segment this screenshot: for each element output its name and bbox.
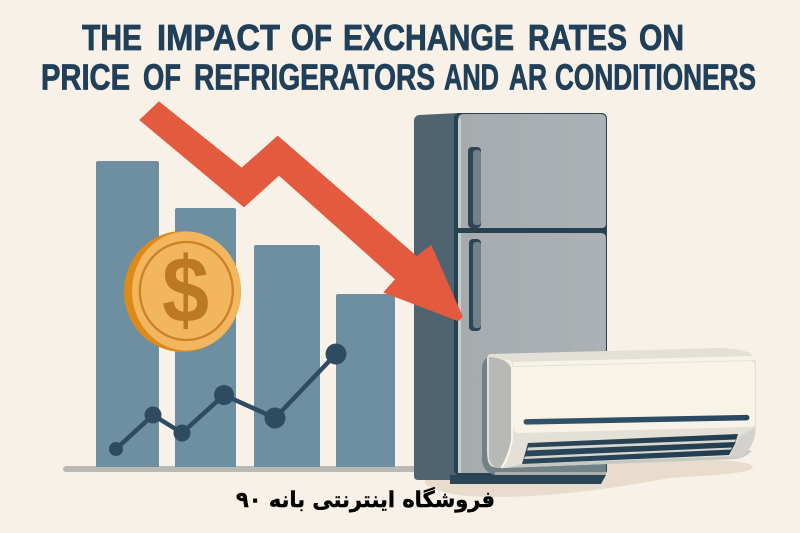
floor line — [63, 466, 433, 472]
red falling arrow — [140, 102, 462, 321]
icon: dollar coin: $ — [162, 237, 209, 342]
store name: فروشگاه اینترنتی بانه ۹۰ — [236, 486, 495, 513]
title — [41, 17, 756, 98]
air conditioner vents — [503, 434, 752, 468]
title: REFRIGERATORS — [194, 56, 435, 98]
fridge base — [450, 475, 606, 484]
fridge lower door — [458, 233, 606, 473]
title: PRICE — [41, 56, 130, 98]
title: EXCHANGE — [343, 17, 514, 58]
air conditioner front panel — [513, 361, 755, 433]
fridge lower handle — [469, 239, 481, 331]
title: AND — [444, 56, 499, 98]
title: IMPACT — [157, 17, 280, 58]
fridge upper handle — [468, 147, 481, 228]
air conditioner — [482, 348, 756, 475]
title: OF — [291, 17, 332, 58]
air conditioner body — [487, 348, 756, 468]
line chart — [109, 344, 346, 456]
air conditioner floor shadow — [425, 460, 753, 497]
title: OF — [143, 56, 181, 98]
title: THE — [82, 17, 142, 58]
icon: dollar coin — [124, 231, 241, 352]
title: AR — [509, 56, 547, 98]
title: ON — [639, 17, 684, 58]
air conditioner display slot — [523, 415, 750, 425]
fridge side panel — [414, 113, 459, 480]
air conditioner left end — [489, 357, 511, 468]
fridge upper door — [458, 114, 606, 228]
bar chart — [96, 161, 395, 467]
refrigerator — [414, 113, 607, 484]
title: RATES — [528, 17, 627, 58]
air conditioner drop shadow — [482, 358, 606, 475]
